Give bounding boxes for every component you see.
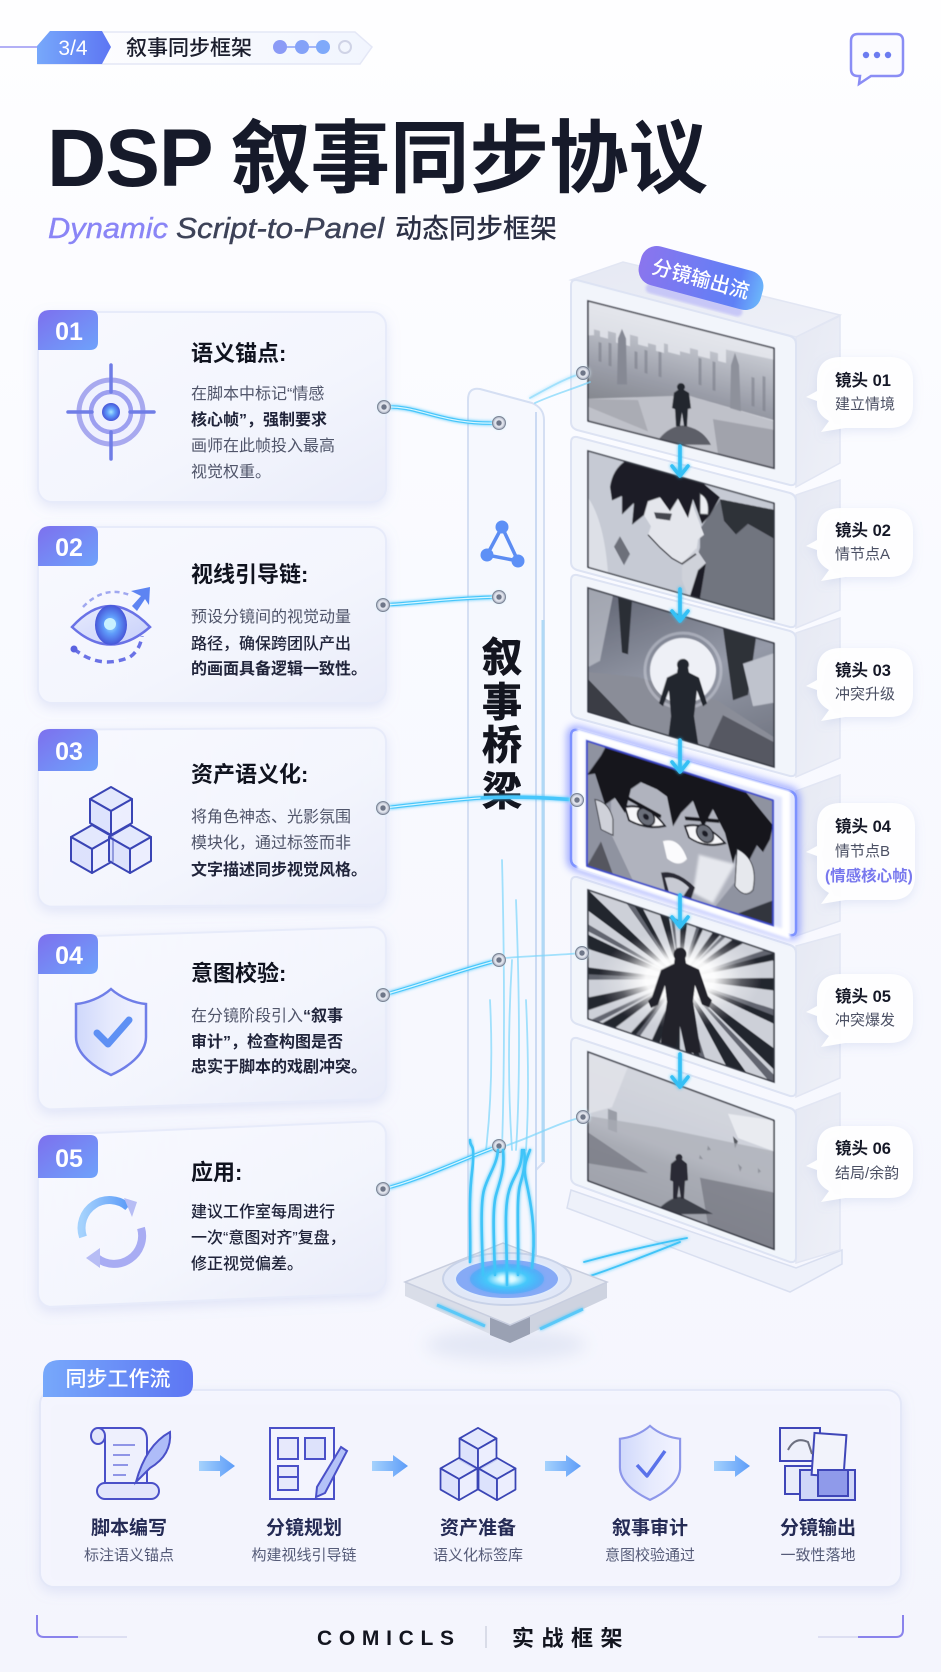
pillar vertical label: 桥: [482, 724, 522, 768]
glowing base: [405, 1243, 607, 1361]
progress dots: [273, 40, 351, 54]
panel: intent check card: [38, 927, 386, 1110]
subtitle: 动态同步框架: [395, 214, 557, 244]
body text: 审计”，检查构图是否: [191, 1032, 343, 1051]
frame 5: [570, 876, 841, 1098]
output frame stack: [567, 262, 842, 1292]
body text: 忠实于脚本的戏剧冲突。: [191, 1057, 367, 1076]
arrow 2: [372, 1455, 408, 1477]
step: storyboard planning: [251, 1428, 357, 1564]
body text: 画师在此帧投入最高: [191, 437, 335, 455]
step badge: 3/4: [58, 37, 88, 60]
body text: [191, 385, 335, 481]
title: DSP: [47, 113, 213, 204]
pillar vertical label: 事: [482, 681, 522, 725]
body text: 将角色神态、光影氛围: [191, 808, 351, 826]
panel: energy burst: [586, 888, 776, 1084]
icon: chat bubble: [851, 34, 903, 84]
step: storyboard output: [780, 1428, 856, 1564]
callout: shot 04 emotional core: (情感核心帧): [825, 866, 913, 885]
callout: shot 05: [806, 974, 913, 1047]
frame 6: [571, 1038, 840, 1263]
badge 02: 02: [55, 534, 83, 562]
panel: semantic anchor card: [38, 310, 386, 502]
pillar: narrative bridge: [468, 389, 544, 1262]
body text: 路径，确保跨团队产出: [191, 635, 351, 653]
workflow tag: 同步工作流: [66, 1368, 170, 1391]
frame 1: [571, 262, 840, 487]
heading: 视线引导链:: [191, 562, 308, 587]
body text: 的画面具备逻辑一致性。: [191, 659, 367, 678]
callout: shot 03: 镜头 03: [835, 660, 891, 680]
callout: shot 01: 建立情境: [835, 395, 895, 413]
body text: 一次“意图对齐”复盘，: [191, 1228, 346, 1247]
panel: workflow: [40, 1360, 901, 1587]
connector cables: [376, 366, 687, 1276]
header step pill: [0, 31, 372, 64]
body text: [191, 607, 367, 678]
panel: gaze chain card: [38, 526, 386, 703]
step badge: [37, 31, 111, 64]
callout: shot 01: 镜头 01: [835, 370, 891, 390]
step: storyboard planning: 构建视线引导链: [251, 1547, 357, 1564]
icon: shield: [620, 1426, 680, 1500]
icon: stacked panels: [780, 1428, 855, 1500]
title: 叙事同步协议: [231, 114, 708, 203]
pillar vertical label: [482, 636, 522, 814]
body text: 模块化，通过标签而非: [191, 834, 351, 852]
frame 2: [571, 437, 840, 628]
icon: target: [68, 365, 154, 459]
callout: shot 02: [806, 508, 913, 581]
step: storyboard output: 一致性落地: [780, 1547, 856, 1564]
callout: shot 06: [806, 1126, 913, 1202]
icon: network: [480, 520, 524, 568]
callout: shot 04 emotional core: 情节点B: [835, 843, 890, 860]
badge 01: [38, 310, 98, 350]
heading: 资产语义化:: [191, 762, 308, 787]
framework label: 实战框架: [512, 1626, 630, 1651]
step: narrative audit: [605, 1426, 695, 1564]
step: asset preparation: [433, 1428, 523, 1564]
panel: desolate ending: [588, 1052, 774, 1259]
tag: storyboard output: [633, 242, 767, 321]
panel: profile portrait: [588, 448, 774, 620]
step: asset preparation: 语义化标签库: [433, 1547, 523, 1564]
body text: [191, 1006, 367, 1076]
arrow 3: [545, 1455, 581, 1477]
step: script writing: [84, 1428, 174, 1564]
subtitle: Script-to-Panel: [176, 213, 386, 245]
panel: asset semantics card: [38, 728, 386, 907]
heading: 应用:: [191, 1160, 242, 1185]
badge 03: 03: [55, 738, 83, 766]
body text: [191, 1202, 346, 1273]
icon: storyboard and pencil: [270, 1428, 347, 1499]
callout: shot 03: 冲突升级: [835, 686, 895, 703]
callout: shot 06: 镜头 06: [835, 1138, 891, 1158]
heading: 语义锚点:: [191, 341, 286, 366]
body text: 文字描述同步视觉风格。: [191, 860, 367, 879]
base plate: [567, 1190, 842, 1292]
icon: cubes: [71, 787, 151, 873]
icon: cycle arrows: [82, 1198, 142, 1268]
callout: shot 04 emotional core: 镜头 04: [835, 816, 892, 836]
step: script writing: 标注语义锚点: [84, 1547, 174, 1564]
pillar vertical label: 叙: [482, 636, 522, 680]
badge 02: [38, 526, 98, 566]
callout: shot 03: [806, 648, 913, 721]
body text: 核心帧”，强制要求: [191, 410, 327, 429]
badge 05: [38, 1135, 98, 1178]
badge 03: [38, 729, 98, 771]
body text: [191, 808, 367, 879]
callout: shot 04 emotional core: [806, 803, 915, 904]
body text: 建议工作室每周进行: [191, 1202, 335, 1221]
panel: application card: [38, 1121, 386, 1307]
callout: shot 02: 镜头 02: [835, 520, 891, 540]
frame 4 highlighted: [571, 730, 840, 936]
badge 04: 04: [55, 942, 83, 970]
badge 05: 05: [55, 1145, 83, 1173]
label: 资产准备: [440, 1517, 516, 1539]
label: 脚本编写: [91, 1516, 167, 1539]
icon: eye: [70, 587, 150, 662]
callout: shot 05: 冲突爆发: [835, 1012, 895, 1029]
tag: storyboard output: 分镜输出流: [649, 255, 752, 303]
badge 04: [38, 934, 98, 974]
frame 3: [571, 575, 840, 794]
panel: shocked closeup: [587, 738, 773, 925]
faint rising cables in pillar: [486, 860, 528, 1150]
badge 01: 01: [55, 318, 83, 346]
body text: 预设分镜间的视觉动量: [191, 607, 351, 626]
pillar vertical label: 梁: [482, 770, 522, 814]
footer brand line: [37, 1615, 903, 1651]
body text: 在脚本中标记“情感: [191, 385, 324, 403]
arrow 4: [714, 1455, 750, 1477]
subtitle: [48, 213, 557, 245]
callout: shot 06: 结局/余韵: [835, 1164, 899, 1182]
callout: shot 01: [806, 357, 913, 432]
heading: 意图校验:: [191, 961, 286, 986]
icon: scroll and quill: [91, 1428, 170, 1499]
step title: 叙事同步框架: [126, 37, 252, 60]
flow arrows between frames: [672, 446, 688, 1087]
panel: city panorama: [588, 301, 774, 475]
body text: 视觉权重。: [191, 463, 271, 481]
brand name: COMICLS: [317, 1627, 461, 1650]
body text: 修正视觉偏差。: [191, 1255, 303, 1273]
bright cables rising from base: [470, 1140, 534, 1285]
callout: shot 02: 情节点A: [835, 546, 890, 563]
label: 叙事审计: [612, 1516, 688, 1539]
icon: cubes: [441, 1428, 515, 1500]
label: 分镜规划: [266, 1516, 342, 1539]
workflow tag: [43, 1360, 193, 1397]
callout: shot 05: 镜头 05: [835, 986, 891, 1006]
subtitle: Dynamic: [48, 213, 169, 245]
body text: 在分镜阶段引入“叙事: [191, 1006, 343, 1025]
label: 分镜输出: [780, 1516, 856, 1539]
panel: figure against moon: [588, 588, 774, 794]
arrow 1: [199, 1455, 235, 1477]
icon: shield: [76, 989, 146, 1075]
step: narrative audit: 意图校验通过: [605, 1546, 695, 1564]
